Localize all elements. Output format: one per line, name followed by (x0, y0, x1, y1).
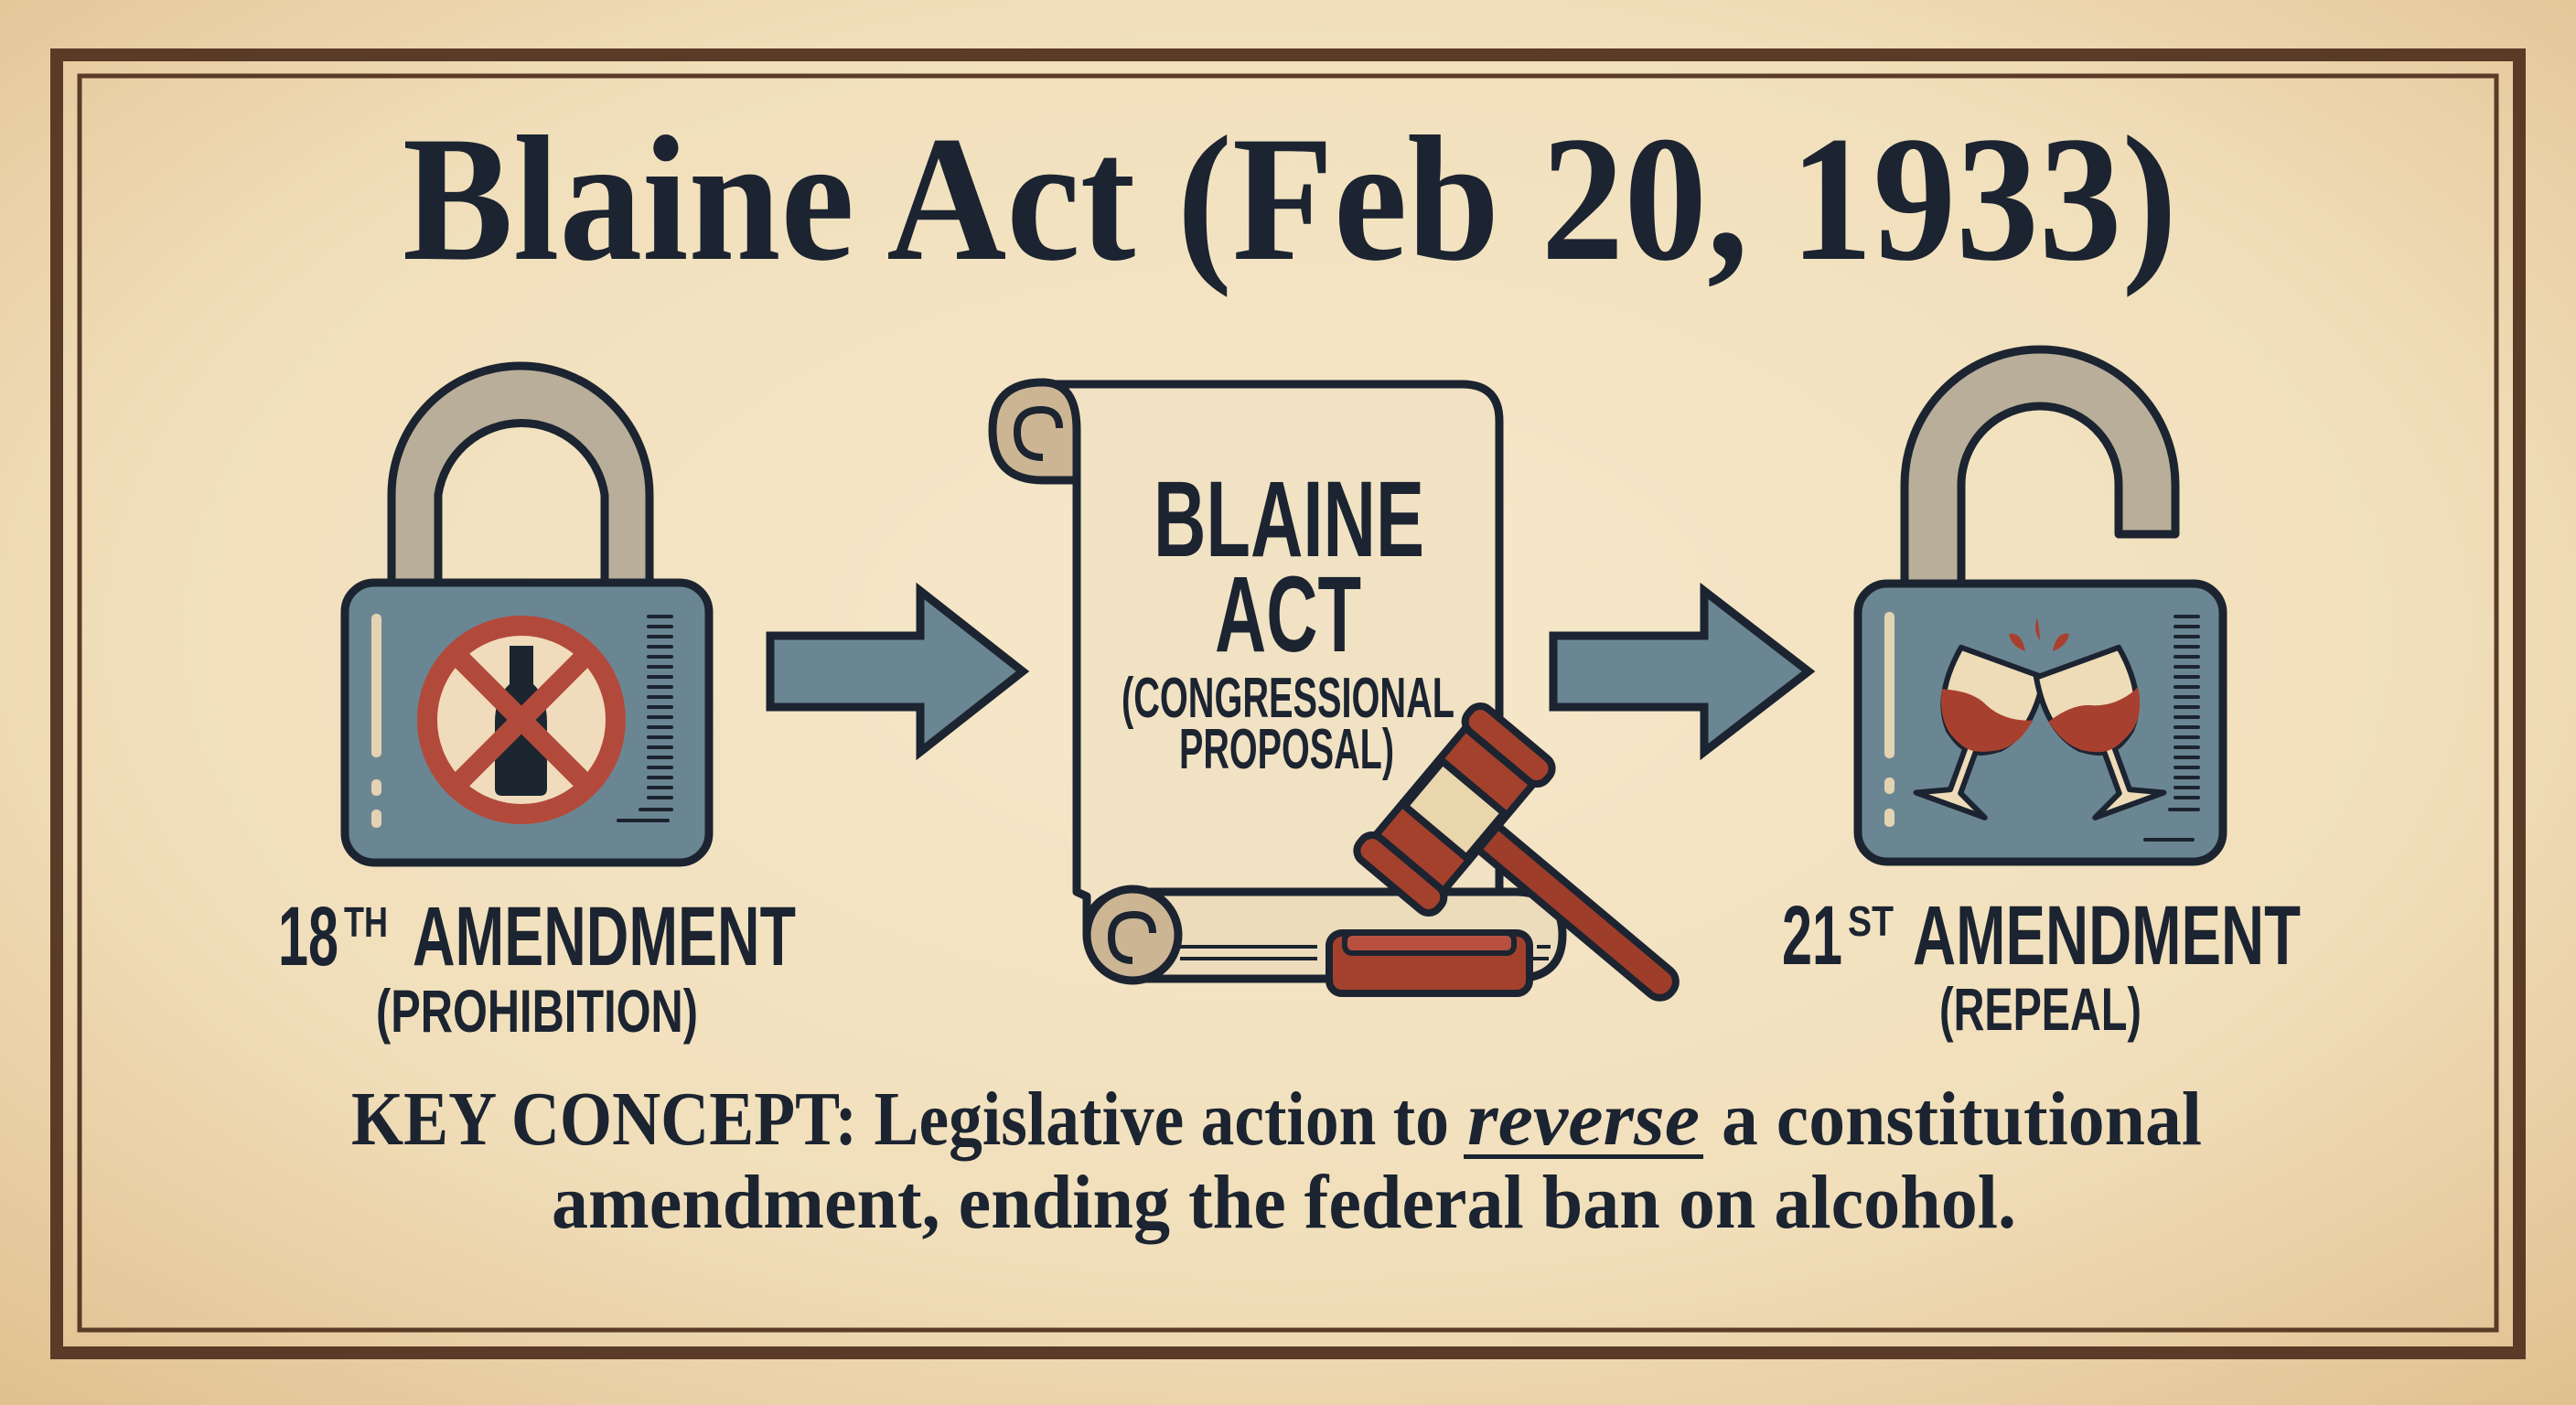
title: Blaine Act (Feb 20, 1933) (402, 100, 2177, 298)
key concept text (351, 1077, 2202, 1245)
key concept text: reverse (1467, 1077, 1700, 1162)
icon: gavel (1329, 701, 1735, 1067)
icon: locked padlock (prohibition) (345, 366, 709, 863)
label: 21st amendment: 21 (1782, 889, 1842, 982)
label: 21st amendment (1782, 889, 2301, 1043)
key concept text: KEY CONCEPT: Legislative action to (351, 1077, 1449, 1162)
icon: toasting wine glasses (1905, 617, 2175, 821)
scroll text: BLAINE (1154, 459, 1424, 580)
scroll text: PROPOSAL) (1179, 718, 1394, 781)
key concept text: amendment, ending the federal ban on alcohol. (552, 1160, 2016, 1245)
scroll text: ACT (1215, 554, 1361, 675)
icon: unlocked padlock (repeal) (1858, 349, 2223, 862)
label: 18th amendment: (PROHIBITION) (376, 977, 698, 1045)
label: 21st amendment: ST (1848, 897, 1894, 945)
label: 18th amendment (278, 890, 796, 1045)
label: 18th amendment: TH (344, 898, 388, 946)
label: 18th amendment: 18 (278, 890, 338, 983)
icon: no-alcohol sign (427, 626, 616, 814)
scroll text (1122, 459, 1454, 781)
icon: scroll (Blaine Act) (993, 382, 1562, 981)
scroll text: (CONGRESSIONAL (1122, 667, 1454, 730)
key concept text: a constitutional (1722, 1077, 2202, 1162)
arrow 2 (1553, 591, 1809, 752)
arrow 1 (770, 591, 1023, 752)
label: 21st amendment: (REPEAL) (1939, 975, 2141, 1043)
label: 21st amendment: AMENDMENT (1913, 889, 2301, 982)
label: 18th amendment: AMENDMENT (413, 890, 796, 983)
